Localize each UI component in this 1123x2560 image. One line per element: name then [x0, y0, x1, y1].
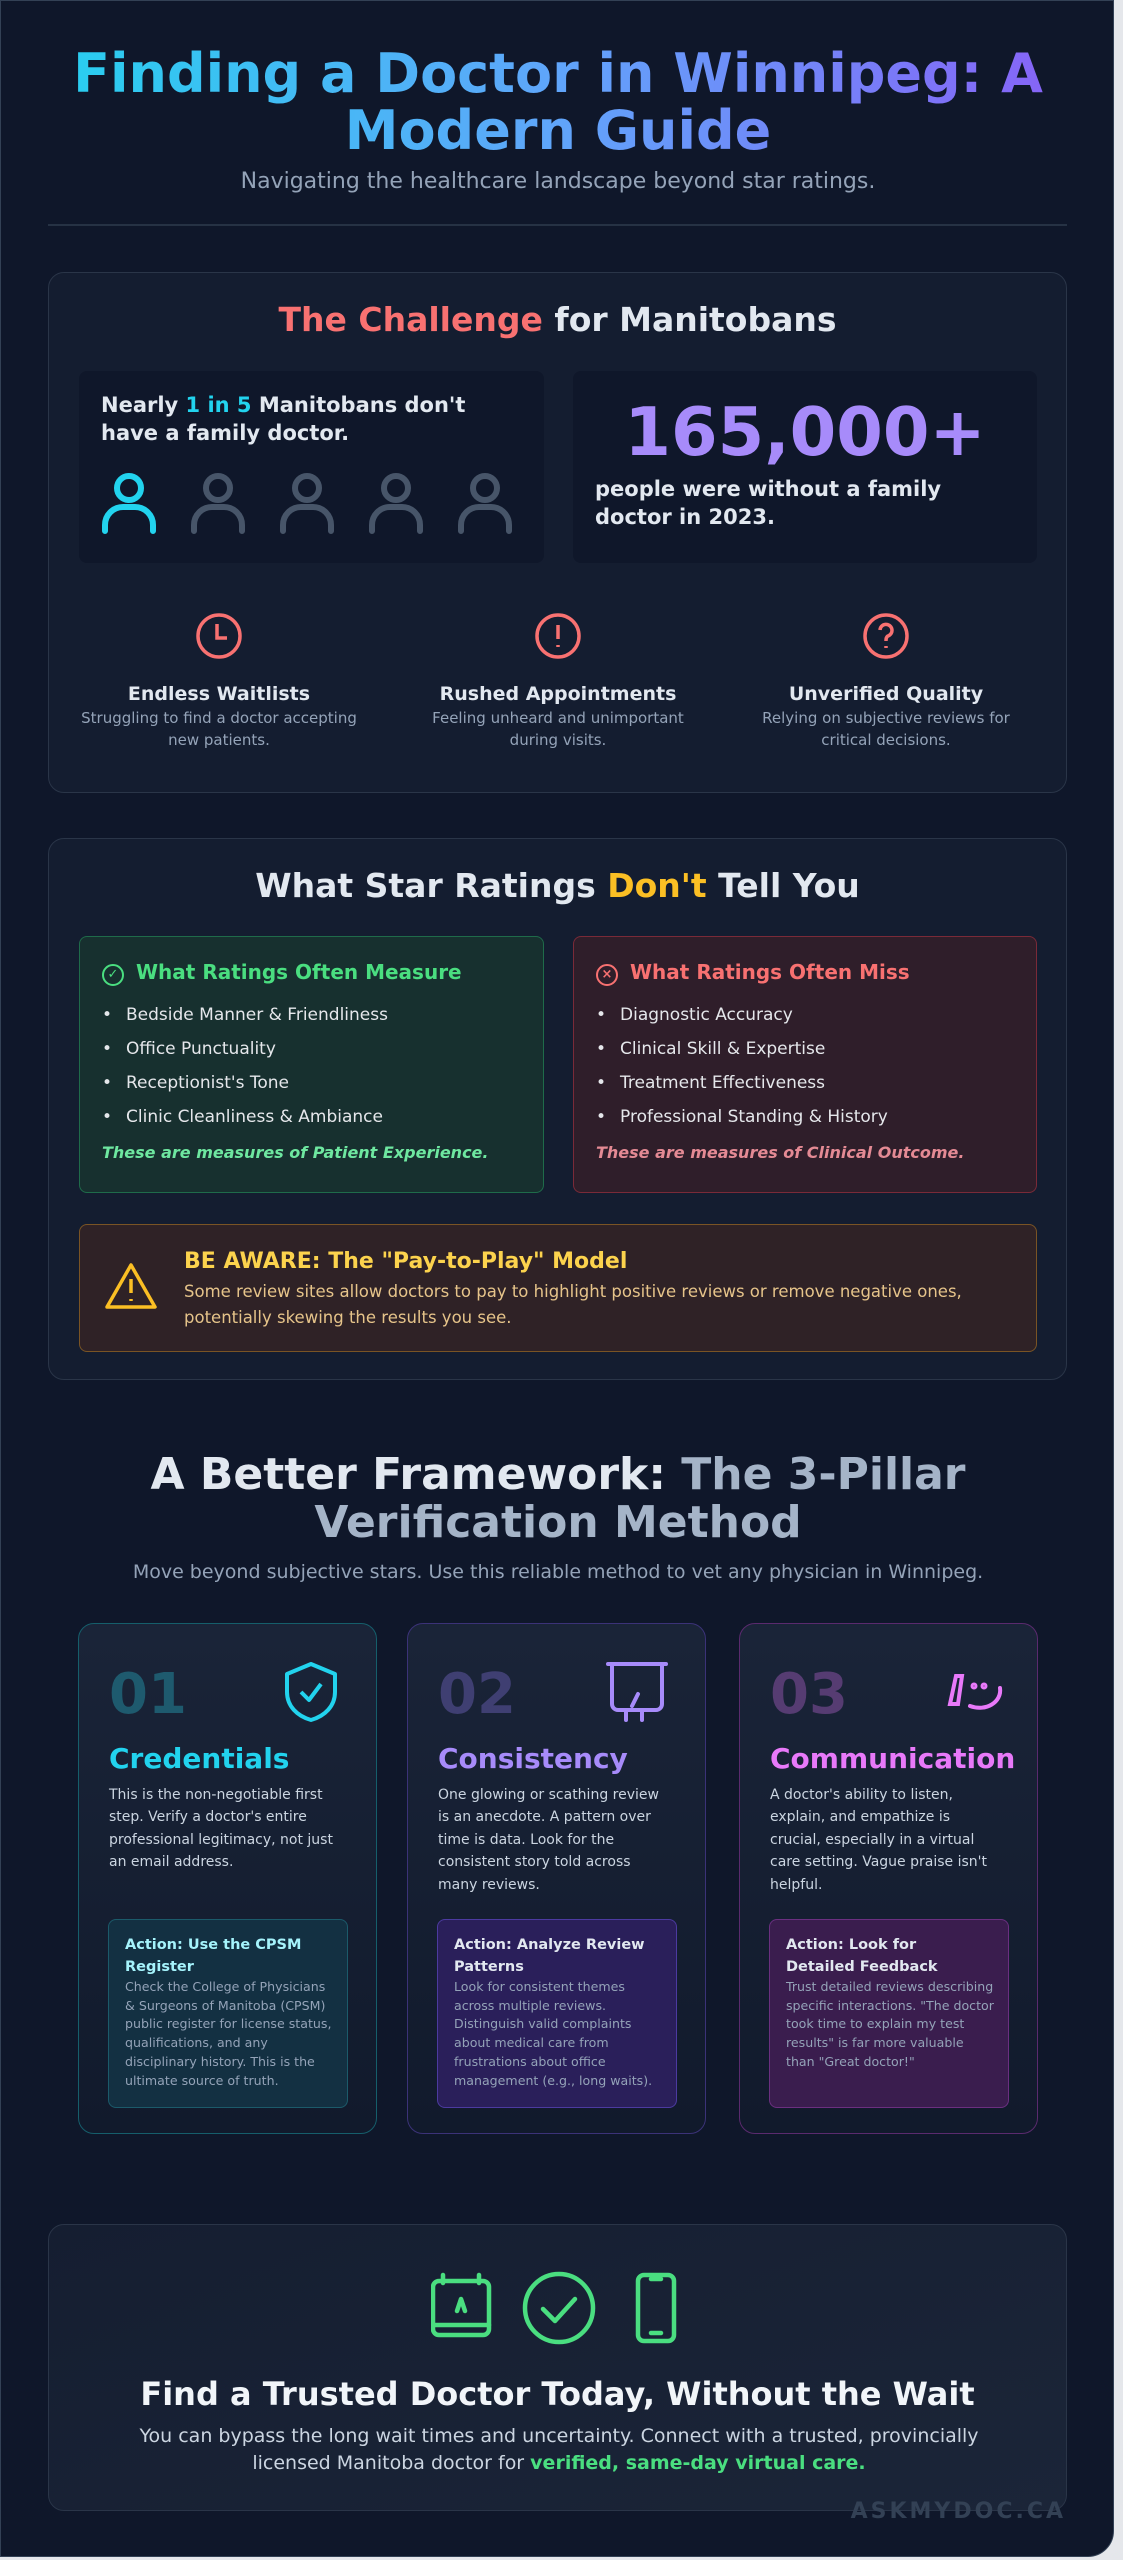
action: CPSM: [108, 1919, 348, 2108]
icon: people row: [102, 473, 512, 534]
item: rushed: [432, 613, 684, 749]
card: credentials: This is the non-negotiable first step. Verify a doctor's entire professional legitimacy, not just an email address.: [109, 1787, 333, 1870]
heading: framework: A Better Framework: The 3-Pillar: [150, 1449, 966, 1500]
text: cta: You can bypass the long wait times and uncertainty. Connect with a trusted, provincially licensed Manitoba doctor for verified, same-day virtual care.: [139, 2425, 979, 2474]
card: consistency: [407, 1623, 706, 2134]
box: miss: Clinical Skill & Expertise: [620, 1039, 825, 1059]
stat box: 1 in 5: Nearly 1 in 5 Manitobans don't: [101, 393, 465, 417]
card: credentials: 01: [109, 1662, 187, 1727]
action: CPSM: Check the College of Physicians & Surgeons of Manitoba (CPSM) public register for license status, qualifications, and any disciplinary history. This is the ultimate source of truth.: [125, 1979, 331, 2088]
stat box: 165,000+: 165,000+: [624, 393, 986, 471]
action: feedback: Detailed Feedback: [786, 1959, 938, 1975]
card: communication: Communication: [770, 1742, 1015, 1775]
stat box: 1 in 5: have a family doctor.: [101, 421, 349, 445]
stat box: 165,000+: [573, 371, 1037, 563]
item: rushed: Rushed Appointments: [440, 683, 676, 705]
panel: call to action: [48, 2224, 1067, 2511]
card: credentials: [78, 1623, 377, 2134]
action: CPSM: Action: Use the CPSM Register: [125, 1937, 301, 1975]
item: unverified: Unverified Quality: [789, 683, 983, 705]
icon: shield: [285, 1662, 337, 1722]
icons: calendar check phone: [431, 2272, 676, 2344]
item: waitlists: Struggling to find a doctor accepting: [81, 709, 357, 727]
box: miss: What Ratings Often Miss: [630, 960, 910, 984]
box: measure: These are measures of Patient Experience.: [102, 1143, 488, 1162]
box: miss: [573, 936, 1037, 1193]
box: measure: Bedside Manner & Friendliness: [126, 1005, 388, 1025]
box: measure: Office Punctuality: [126, 1039, 276, 1059]
title: Finding a Doctor in Winnipeg: A: [73, 42, 1043, 105]
action: feedback: Trust detailed reviews describing specific interactions. "The doctor took time to explain my test results" is far more valuable than "Great doctor!": [786, 1979, 994, 2069]
title: Modern Guide: [345, 99, 771, 162]
box: measure: Clinic Cleanliness & Ambiance: [126, 1107, 383, 1127]
icon: speech face: [948, 1674, 1002, 1710]
heading: framework: [150, 1449, 966, 1548]
heading: framework: Verification Method: [314, 1497, 802, 1548]
item: waitlists: Endless Waitlists: [128, 683, 310, 705]
action: patterns: [437, 1919, 677, 2108]
box: measure: ✓: [108, 967, 118, 982]
box: measure: Receptionist's Tone: [126, 1073, 289, 1093]
card: consistency: 02: [438, 1662, 516, 1727]
panel: challenge: [48, 272, 1067, 793]
stat box: 165,000+: people were without a family: [595, 477, 941, 501]
heading: star ratings: What Star Ratings Don't Tell You: [255, 866, 860, 905]
callout: pay-to-play: Some review sites allow doctors to pay to highlight positive reviews or remove negative ones, potentially skewing the results you see.: [184, 1282, 962, 1327]
card: communication: 03: [770, 1662, 848, 1727]
box: miss: ×: [602, 967, 612, 982]
card: consistency: Consistency: [438, 1742, 628, 1775]
title: [73, 42, 1043, 162]
box: miss: These are measures of Clinical Outcome.: [596, 1143, 964, 1162]
card: communication: [739, 1623, 1038, 2134]
action: feedback: [769, 1919, 1009, 2108]
box: measure: What Ratings Often Measure: [136, 960, 462, 984]
action: patterns: Action: Analyze Review Patterns: [454, 1937, 645, 1975]
item: waitlists: new patients.: [168, 731, 270, 749]
item: unverified: critical decisions.: [821, 731, 951, 749]
card: communication: A doctor's ability to listen, explain, and empathize is crucial, especially in a virtual care setting. Vague praise isn't helpful.: [770, 1787, 987, 1893]
brand: ASKMYDOC.CA: [851, 2499, 1066, 2524]
card: credentials: Credentials: [109, 1742, 289, 1775]
callout: pay-to-play: BE AWARE: The "Pay-to-Play" Model: [184, 1249, 627, 1274]
item: unverified: Relying on subjective reviews for: [762, 709, 1010, 727]
item: unverified: [762, 613, 1010, 749]
heading: challenge: The Challenge for Manitobans: [278, 300, 837, 339]
icon: chart board: [606, 1662, 668, 1722]
panel: star ratings: [48, 838, 1067, 1380]
stat box: 1 in 5: [79, 371, 544, 563]
box: miss: Treatment Effectiveness: [620, 1073, 825, 1093]
stat box: 165,000+: doctor in 2023.: [595, 505, 775, 529]
callout: pay-to-play: [79, 1224, 1037, 1352]
action: feedback: Action: Look for: [786, 1937, 916, 1953]
box: miss: Professional Standing & History: [620, 1107, 888, 1127]
heading: cta: Find a Trusted Doctor Today, Without the Wait: [140, 2375, 975, 2413]
subtitle: framework: Move beyond subjective stars. Use this reliable method to vet any physician in Winnipeg.: [133, 1561, 983, 1583]
action: patterns: Look for consistent themes across multiple reviews. Distinguish valid complaints about medical care from frustrations about office management (e.g., long waits).: [454, 1979, 652, 2088]
item: rushed: during visits.: [510, 731, 606, 749]
card: consistency: One glowing or scathing review is an anecdote. A pattern over time is data. Look for the consistent story told across many reviews.: [438, 1787, 659, 1893]
item: waitlists: [81, 613, 357, 749]
icon: warning: [105, 1263, 157, 1309]
item: rushed: Feeling unheard and unimportant: [432, 709, 684, 727]
box: miss: Diagnostic Accuracy: [620, 1005, 793, 1025]
subtitle: Navigating the healthcare landscape beyond star ratings.: [241, 169, 875, 194]
box: measure: [79, 936, 544, 1193]
